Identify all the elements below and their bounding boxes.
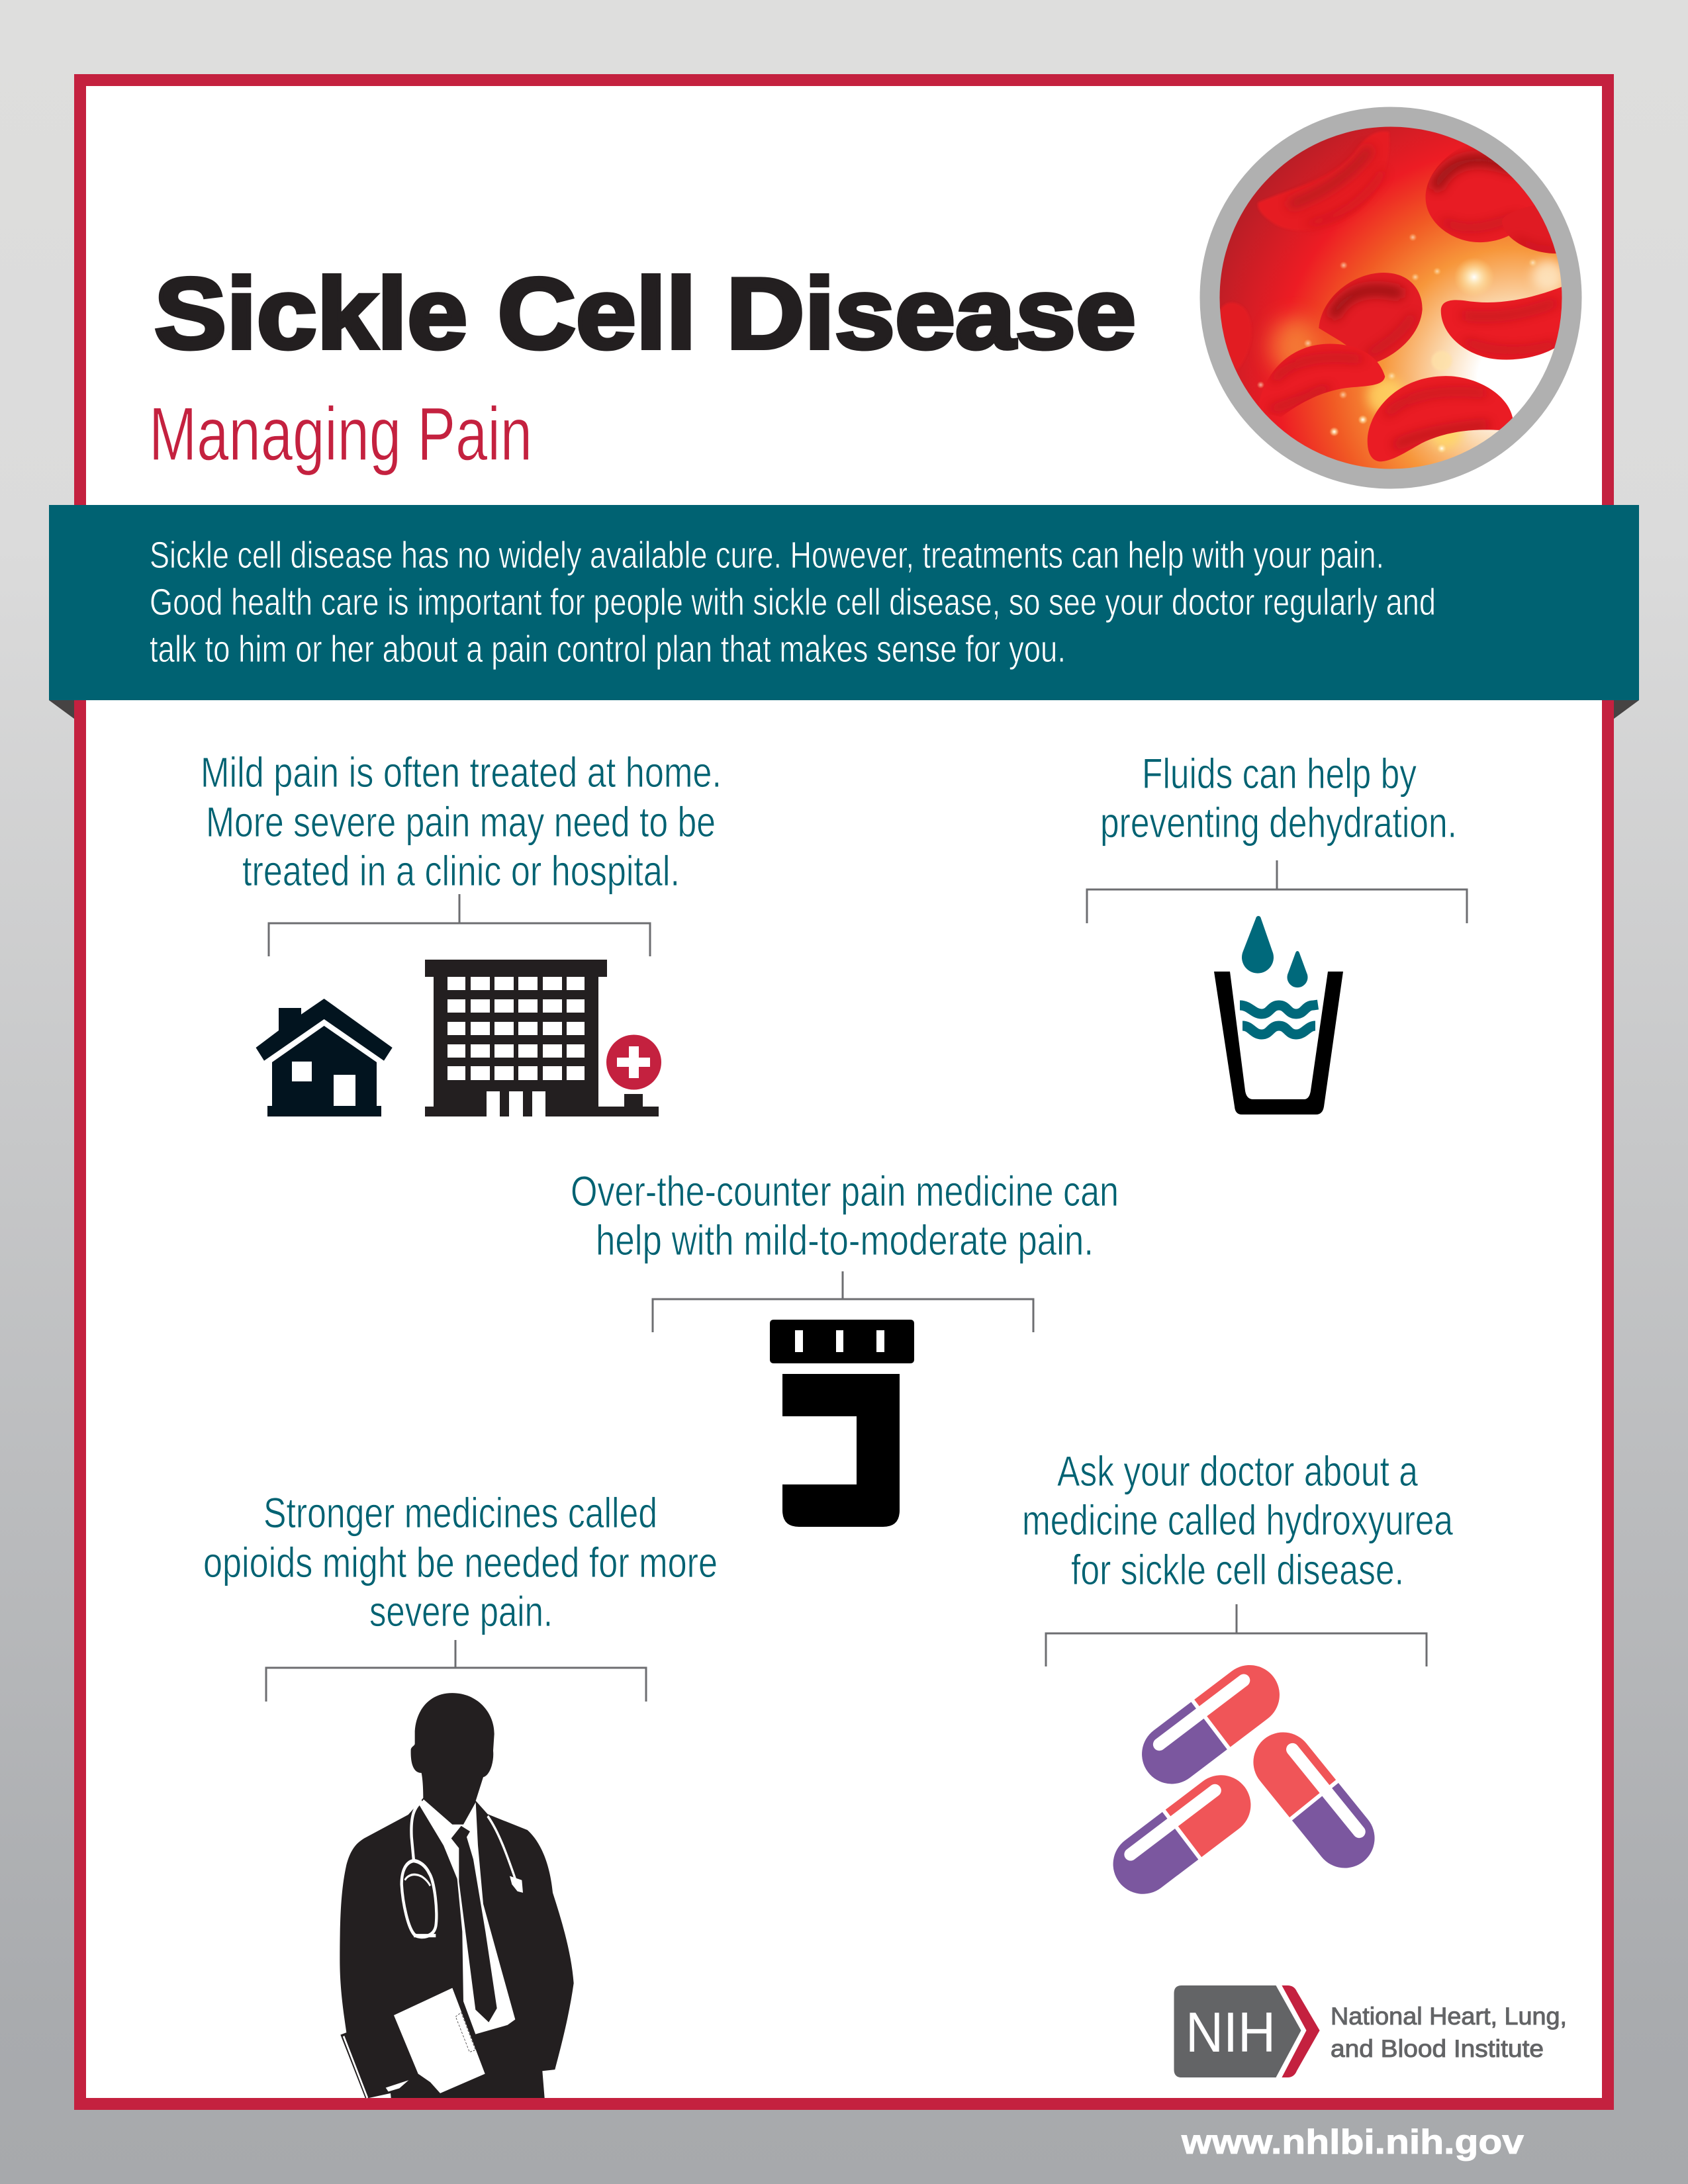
ring: grey circle frame <box>1210 116 1571 479</box>
banner text: talk to him or her about a pain control plan that makes sense for you. <box>150 628 1066 670</box>
folder edge <box>344 2036 367 2098</box>
text block: opioids: Stronger medicines called <box>263 1489 657 1537</box>
banner text <box>150 534 1436 670</box>
banner background <box>49 505 1639 700</box>
text block: fluids: Fluids can help by <box>1142 750 1417 797</box>
stethoscope <box>402 1801 515 1937</box>
text block: hydroxyurea: medicine called hydroxyurea <box>1022 1496 1453 1544</box>
panel: teal intro banner <box>49 505 1639 700</box>
white cross <box>617 1046 650 1078</box>
bracket: over-the-counter <box>653 1271 1033 1332</box>
stethoscope chest piece <box>510 1876 523 1893</box>
folded corner: left <box>49 700 74 719</box>
water waves <box>1240 1005 1318 1034</box>
bracket: fluids <box>1087 860 1467 923</box>
text block: mild pain: More severe pain may need to be <box>206 798 716 846</box>
icon: glass of water <box>1214 916 1343 1115</box>
bottle cap <box>770 1320 914 1363</box>
drop large <box>1242 916 1274 974</box>
bracket: opioids <box>266 1640 646 1702</box>
icon: hospital building <box>425 960 661 1116</box>
title: Sickle Cell Disease <box>154 257 1136 370</box>
doctor body <box>340 1693 574 2098</box>
text block: over-the-counter <box>571 1167 1119 1264</box>
text block: hydroxyurea: Ask your doctor about a <box>1057 1447 1418 1495</box>
folded corner: right <box>1614 700 1639 719</box>
windows <box>447 977 585 1080</box>
icon: medicine bottle <box>770 1320 914 1527</box>
folder corner <box>369 2093 391 2098</box>
bottle body with label cut-out <box>782 1374 900 1527</box>
logo: NIH <box>1174 1985 1567 2077</box>
clipboard clip dashes <box>455 2013 475 2052</box>
text block: over-the-counter: Over-the-counter pain medicine can <box>571 1167 1119 1215</box>
capsule top <box>1129 1653 1292 1796</box>
text block: mild pain: Mild pain is often treated at home. <box>201 749 722 796</box>
logo caption <box>1331 2003 1567 2062</box>
bracket: hydroxyurea <box>1046 1604 1427 1666</box>
glass <box>1214 972 1343 1115</box>
text block: fluids <box>1100 750 1457 846</box>
capsule right <box>1241 1720 1387 1880</box>
clipboard <box>394 1988 485 2093</box>
text block: over-the-counter: help with mild-to-moderate pain. <box>596 1216 1094 1264</box>
shirt <box>419 1799 515 2034</box>
pen <box>386 2080 408 2091</box>
text block: opioids: severe pain. <box>369 1588 553 1635</box>
sickle and round red cells <box>1219 127 1562 469</box>
text block: fluids: preventing dehydration. <box>1100 799 1457 846</box>
image: blood cells in a round frame <box>1205 116 1583 485</box>
bracket: mild pain <box>269 894 650 956</box>
building <box>425 960 659 1116</box>
text block: mild pain <box>201 749 722 895</box>
logo caption: and Blood Institute <box>1331 2035 1544 2062</box>
text block: hydroxyurea <box>1022 1447 1453 1594</box>
logo letters: NIH <box>1186 2001 1276 2064</box>
logo red chevron <box>1282 1985 1320 2077</box>
icon: house <box>256 999 393 1116</box>
banner text: Sickle cell disease has no widely available cure. However, treatments can help with your pain. <box>150 534 1384 576</box>
text block: opioids: opioids might be needed for more <box>203 1539 718 1586</box>
necktie <box>451 1826 497 2023</box>
subtitle: Managing Pain <box>149 392 532 477</box>
logo caption: National Heart, Lung, <box>1331 2003 1567 2030</box>
website URL: www.nhlbi.nih.gov <box>1181 2123 1524 2161</box>
text block: hydroxyurea: for sickle cell disease. <box>1071 1546 1404 1594</box>
red cross sign <box>606 1035 661 1089</box>
text block: mild pain: treated in a clinic or hospital. <box>242 847 680 895</box>
sign post <box>624 1094 643 1107</box>
capsule lower left <box>1101 1762 1263 1907</box>
icon: doctor silhouette <box>340 1693 574 2098</box>
icon: three capsules <box>1101 1653 1387 1907</box>
logo grey badge <box>1174 1985 1301 2077</box>
text block: opioids <box>203 1489 718 1635</box>
drop small <box>1287 951 1308 987</box>
